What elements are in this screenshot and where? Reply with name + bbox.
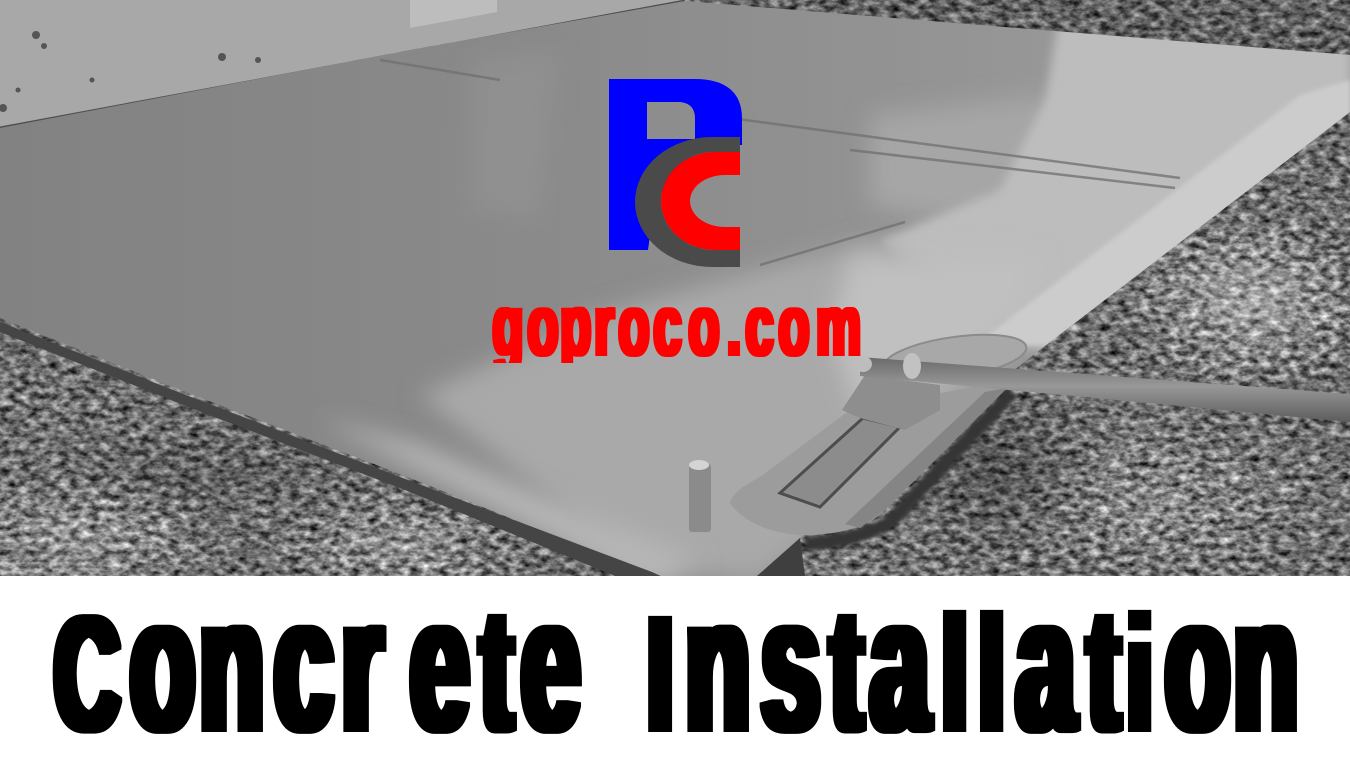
float blade <box>730 385 1007 535</box>
concrete slab <box>0 0 1350 590</box>
float pole <box>860 357 1350 422</box>
door threshold <box>410 0 497 28</box>
title: i <box>1127 583 1152 760</box>
wall marks <box>0 31 261 112</box>
stake top <box>689 460 709 470</box>
float head <box>842 375 940 430</box>
title: C <box>55 583 119 760</box>
screed lines <box>380 60 1180 265</box>
float shadow on grass <box>805 392 1012 544</box>
logo letter c, red <box>661 152 740 250</box>
float bracket <box>780 418 900 507</box>
slab near-edge light patch <box>342 422 686 576</box>
logo: PC monogram <box>609 79 742 267</box>
float blade lower stripe <box>845 388 1007 528</box>
slab edge band <box>975 80 1350 345</box>
wall <box>0 0 690 128</box>
pole clamp <box>903 353 921 379</box>
logo letter P <box>609 79 742 250</box>
slab dry right zone <box>880 22 1350 350</box>
wall base shadow line <box>0 1 685 128</box>
slab lower wet sheen <box>420 240 1020 580</box>
float top plate <box>886 334 1028 368</box>
slab textured light patch <box>830 248 1000 398</box>
pole end clamp <box>860 357 872 372</box>
slab corner side face <box>757 538 805 576</box>
wall reflection <box>470 50 560 220</box>
title: ll <box>942 583 1004 760</box>
slab mid lighter zone <box>867 98 1040 216</box>
title: I <box>648 583 673 760</box>
slab front edge shadow <box>0 322 665 578</box>
logo letter c, grey <box>635 137 740 267</box>
white title band <box>0 576 1350 760</box>
stake <box>689 464 711 532</box>
title <box>55 557 1298 760</box>
website address: goproco.com <box>492 278 861 375</box>
